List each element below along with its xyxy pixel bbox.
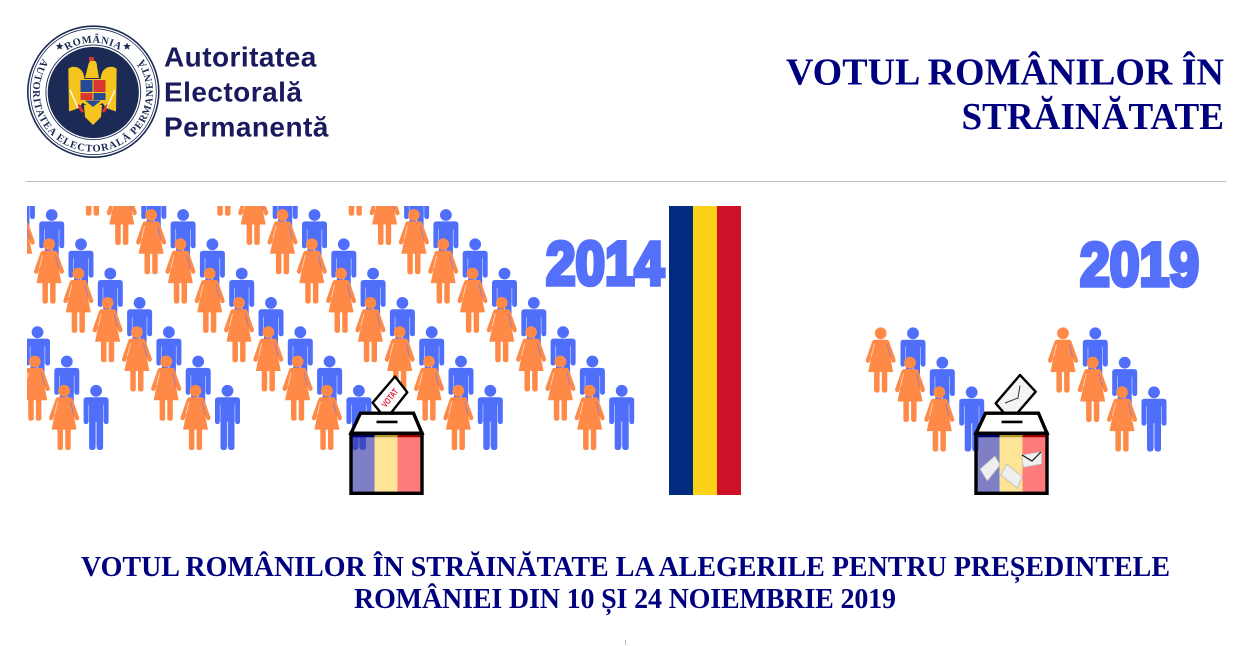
logo: ROMÂNIA — [64, 34, 120, 50]
subtitle — [81, 552, 1170, 615]
envelopes inside box 2019 — [980, 452, 1042, 488]
icon: coat of arms eagle — [68, 57, 117, 125]
organisation name: Electorală — [164, 76, 302, 108]
ballot paper 2014: VOTAT — [380, 386, 401, 409]
year 2014: 2014 — [546, 230, 664, 298]
subtitle: VOTUL ROMÂNILOR ÎN STRĂINĂTATE LA ALEGERILE PENTRU PREȘEDINTELE — [81, 552, 1170, 583]
logo — [27, 25, 160, 158]
ballot box 2014 — [351, 413, 422, 493]
crowd 2014 — [27, 206, 634, 450]
title: VOTUL ROMÂNILOR ÎN — [786, 52, 1224, 94]
year 2019: 2019 — [1080, 231, 1199, 299]
title: STRĂINĂTATE — [962, 96, 1224, 138]
title — [786, 52, 1224, 138]
romanian flag — [669, 206, 741, 495]
envelope entering box 2019 — [996, 375, 1036, 421]
subtitle: ROMÂNIEI DIN 10 ȘI 24 NOIEMBRIE 2019 — [354, 584, 896, 615]
ballot box 2019 — [976, 413, 1047, 493]
organisation name — [164, 42, 329, 142]
organisation name: Permanentă — [164, 112, 329, 142]
crowd 2019 — [866, 327, 1166, 452]
organisation name: Autoritatea — [164, 42, 317, 72]
ballot paper 2014 — [373, 376, 407, 419]
logo: AUTORITATEA ELECTORALĂ PERMANENTĂ — [32, 58, 154, 152]
